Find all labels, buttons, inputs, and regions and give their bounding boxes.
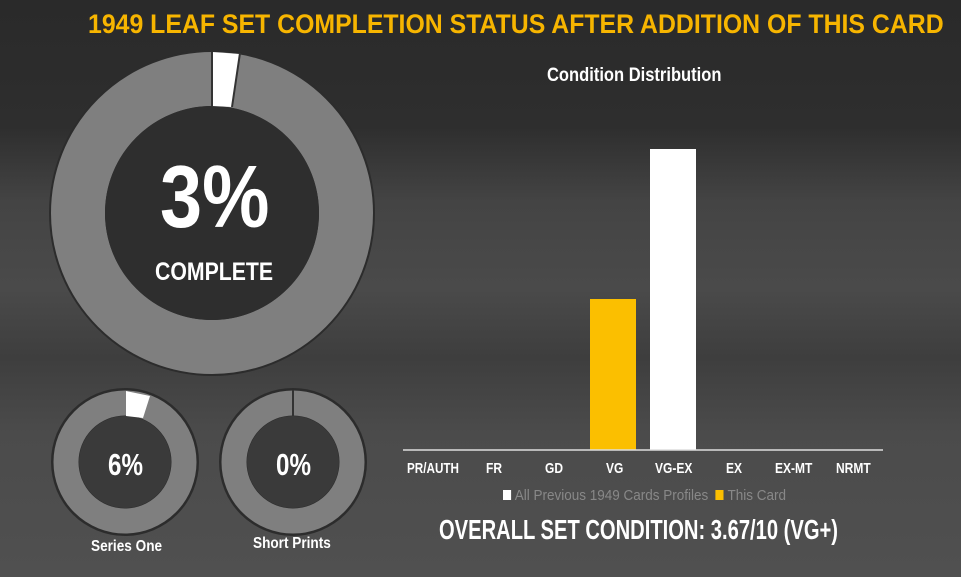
axis labels: FR [486,460,502,477]
legend: All Previous 1949 Cards Profiles This Card [515,487,786,504]
complete label: COMPLETE [155,258,273,286]
short prints label: Short Prints [253,535,331,552]
axis labels: VG [606,460,623,477]
overall set condition: OVERALL SET CONDITION: 3.67/10 (VG+) [439,514,838,545]
bar chart [403,149,883,450]
title: 1949 LEAF SET COMPLETION STATUS AFTER ADDITION OF THIS CARD [88,9,944,39]
series one label: Series One [91,538,162,555]
axis labels: VG-EX [655,460,692,477]
short prints pct: 0% [276,447,311,482]
donut: series one [51,388,199,536]
axis labels: EX [726,460,742,477]
axis labels: PR/AUTH [407,460,459,477]
series one pct: 6% [108,447,143,482]
axis labels: NRMT [836,460,871,477]
donut: short prints [219,388,367,536]
chart title: Condition Distribution [547,65,721,86]
axis labels: GD [545,460,563,477]
axis labels: EX-MT [775,460,812,477]
axis labels [407,460,871,477]
big percent: 3% [160,147,269,246]
donut: overall completion [49,50,375,376]
